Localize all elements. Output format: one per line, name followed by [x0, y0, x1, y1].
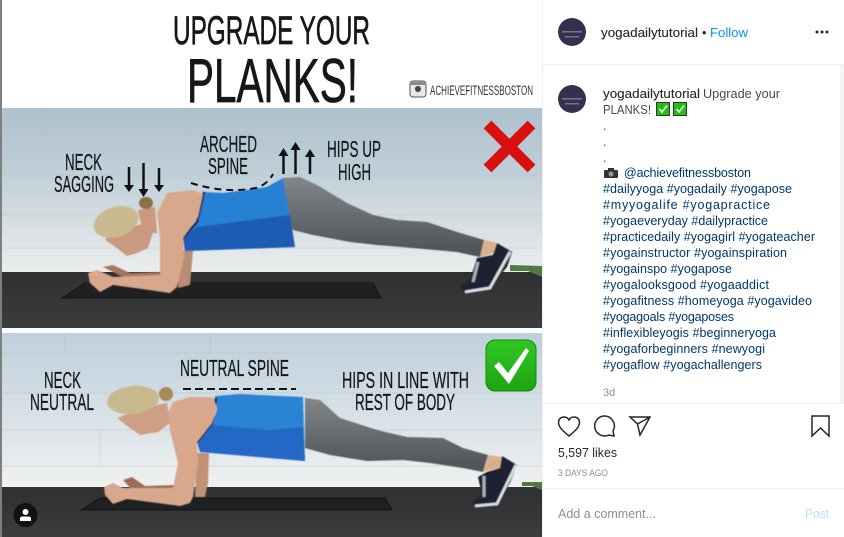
woman: arched plank — [88, 177, 512, 293]
dashed spine line — [183, 388, 296, 390]
icon: heart — [558, 417, 580, 436]
likes: 5,597 likes — [558, 446, 617, 460]
hashtags: #yogaforbeginners #newyogi — [603, 342, 765, 356]
post header: • — [702, 26, 706, 40]
caption: . — [603, 151, 606, 165]
label: arched spine: ARCHED — [200, 131, 257, 157]
comment input — [558, 507, 830, 521]
floor — [2, 487, 542, 537]
panel: incorrect plank — [2, 108, 542, 328]
icon: red cross — [488, 124, 532, 168]
label: neutral spine: NEUTRAL SPINE — [180, 355, 289, 381]
label: hips in line: REST OF BODY — [355, 389, 455, 415]
exercise mat — [62, 283, 381, 298]
arrows down — [124, 163, 164, 197]
hashtags: #yogalooksgood #yogaaddict — [603, 278, 770, 292]
white gap between panels — [2, 328, 542, 333]
title: PLANKS! — [187, 47, 358, 116]
icon: share — [630, 417, 650, 435]
icon: camera — [604, 168, 618, 178]
title: UPGRADE YOUR — [173, 9, 370, 53]
comment input: Post — [805, 507, 830, 521]
hashtags: #dailyyoga #yogadaily #yogapose — [603, 182, 792, 196]
woman: neutral plank — [104, 383, 517, 507]
icon: user badge — [14, 503, 38, 527]
post header: yogadailytutorial — [601, 26, 698, 40]
icon: bookmark — [812, 416, 829, 436]
sidebar background — [542, 0, 844, 537]
timestamp: 3 DAYS AGO — [558, 468, 608, 478]
post header: Follow — [710, 26, 749, 40]
hashtags: #yogainspo #yogapose — [603, 262, 732, 276]
hashtags — [603, 182, 815, 372]
icon: green check — [486, 340, 536, 391]
credit: achievefitnessboston — [410, 81, 533, 98]
label: neck sagging: SAGGING — [54, 171, 114, 197]
floor — [2, 272, 542, 328]
hashtags: #yogainstructor #yogainspiration — [603, 246, 787, 260]
label: hips in line: HIPS IN LINE WITH — [342, 367, 469, 393]
avatar — [558, 18, 586, 46]
dashed spine curve — [191, 174, 273, 190]
label: hips up high — [327, 136, 381, 185]
title — [173, 9, 370, 116]
label: neck sagging: NECK — [65, 149, 102, 175]
caption: . — [603, 119, 606, 133]
caption — [558, 85, 815, 399]
post header — [558, 18, 828, 46]
credit: achievefitnessboston: ACHIEVEFITNESSBOSTON — [430, 83, 533, 98]
caption: yogadailytutorial — [603, 87, 700, 101]
action icons — [558, 416, 829, 436]
label: neck neutral — [30, 367, 94, 415]
hashtags: #yogaflow #yogachallengers — [603, 358, 762, 372]
icon: check emoji — [656, 102, 686, 116]
label: hips up high: HIGH — [338, 159, 371, 185]
hashtags: #inflexibleyogis #beginneryoga — [603, 326, 776, 340]
grass — [522, 482, 542, 490]
label: hips in line — [342, 367, 469, 415]
wall background — [2, 333, 542, 488]
caption: @achievefitnessboston — [624, 166, 751, 180]
caption: PLANKS! — [603, 103, 651, 117]
hashtags: #practicedaily #yogagirl #yogateacher — [603, 230, 815, 244]
icon: comment — [595, 416, 614, 436]
label: neck neutral: NEUTRAL — [30, 389, 94, 415]
arrows up — [278, 142, 315, 174]
avatar — [558, 85, 586, 113]
label: neck sagging — [54, 149, 114, 197]
more menu — [816, 30, 828, 34]
caption: . — [603, 135, 606, 149]
hashtags: #myyogalife #yogapractice — [603, 198, 770, 212]
label: arched spine — [200, 131, 257, 179]
hashtags: #yogagoals #yogaposes — [603, 310, 734, 324]
wall background — [2, 108, 542, 273]
label: hips up high: HIPS UP — [327, 136, 381, 162]
grass — [510, 265, 542, 277]
exercise mat — [81, 498, 392, 510]
hashtags: #yogafitness #homeyoga #yogavideo — [603, 294, 812, 308]
label: neck neutral: NECK — [44, 367, 81, 393]
caption: 3d — [603, 387, 615, 399]
panel: correct plank — [2, 333, 542, 537]
comment input: Add a comment... — [558, 507, 656, 521]
caption: Upgrade your — [703, 87, 780, 101]
hashtags: #yogaeveryday #dailypractice — [603, 214, 768, 228]
label: arched spine: SPINE — [208, 153, 248, 179]
